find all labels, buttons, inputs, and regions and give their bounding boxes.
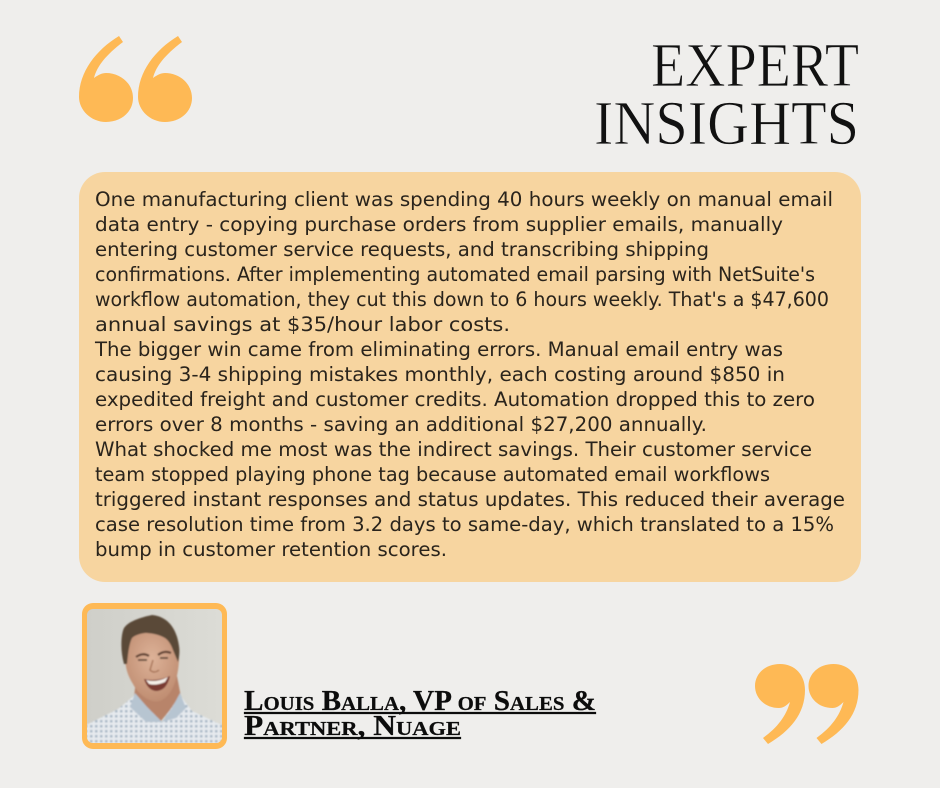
quote text: entering customer service requests, and transcribing shipping bbox=[95, 238, 709, 261]
quote text: errors over 8 months - saving an additional $27,200 annually. bbox=[95, 413, 707, 436]
expert name and role: Partner, Nuage bbox=[244, 711, 461, 742]
icon: closing quotation marks bbox=[755, 664, 858, 744]
panel: testimonial quote bbox=[79, 172, 861, 582]
neck bbox=[134, 676, 181, 722]
title bbox=[594, 32, 859, 158]
quote text: team stopped playing phone tag because automated email workflows bbox=[95, 463, 770, 486]
infographic canvas bbox=[79, 36, 861, 749]
quote text: annual savings at $35/hour labor costs. bbox=[95, 313, 510, 336]
quote text: expedited freight and customer credits. Automation dropped this to zero bbox=[95, 388, 815, 411]
shirt bbox=[87, 696, 222, 743]
quote text: One manufacturing client was spending 40 hours weekly on manual email bbox=[95, 188, 833, 211]
quote text: causing 3-4 shipping mistakes monthly, each costing around $850 in bbox=[95, 363, 785, 386]
quote text: triggered instant responses and status updates. This reduced their average bbox=[95, 488, 845, 511]
quote text: The bigger win came from eliminating errors. Manual email entry was bbox=[94, 338, 783, 361]
expert name and role: Louis Balla, VP of Sales & bbox=[244, 686, 596, 717]
hair bbox=[121, 615, 179, 664]
quote text: data entry - copying purchase orders from supplier emails, manually bbox=[95, 213, 783, 236]
title: EXPERT bbox=[651, 32, 859, 100]
quote text: What shocked me most was the indirect savings. Their customer service bbox=[95, 438, 812, 461]
title: INSIGHTS bbox=[594, 90, 859, 158]
portrait photo with orange frame bbox=[82, 603, 227, 749]
eyes and brows bbox=[136, 652, 171, 657]
nose shadow bbox=[150, 660, 159, 672]
expert name and role bbox=[244, 686, 596, 742]
mouth bbox=[144, 676, 170, 691]
face bbox=[125, 630, 179, 702]
quote text: confirmations. After implementing automated email parsing with NetSuite's bbox=[95, 263, 815, 286]
quote text: case resolution time from 3.2 days to same-day, which translated to a 15% bbox=[95, 513, 834, 536]
quote text: workflow automation, they cut this down to 6 hours weekly. That's a $47,600 bbox=[95, 288, 829, 311]
quote text: bump in customer retention scores. bbox=[95, 538, 447, 561]
quote text bbox=[94, 188, 845, 561]
icon: opening quotation marks bbox=[79, 36, 192, 122]
